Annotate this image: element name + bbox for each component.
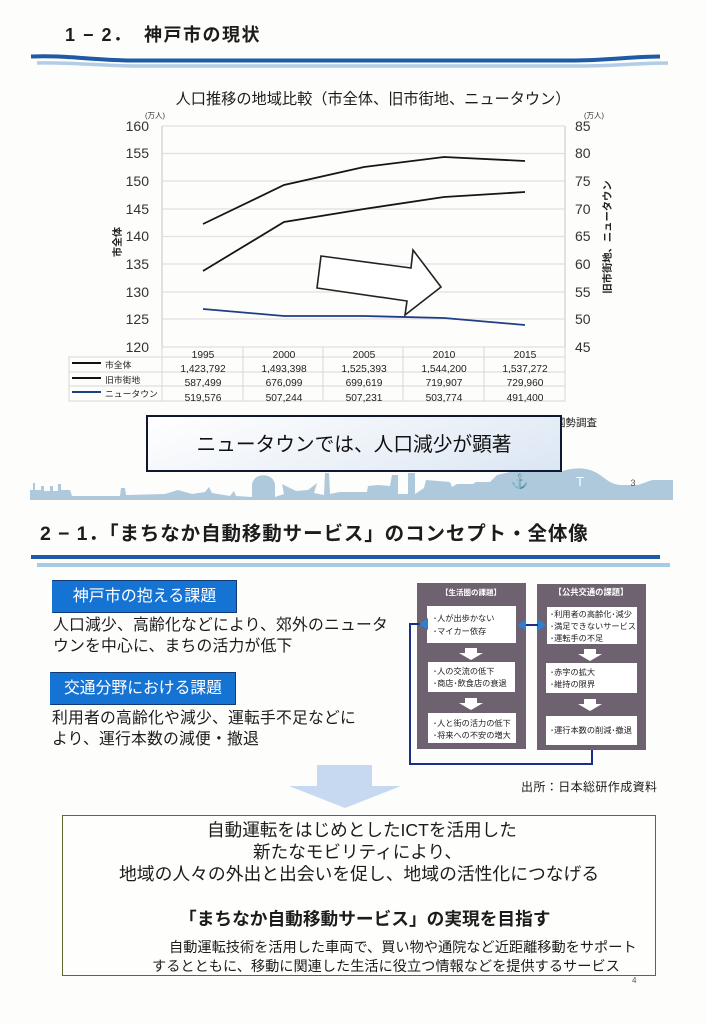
right axis labels: 65 — [575, 228, 591, 244]
label: transport issues — [50, 672, 236, 705]
text: service description line 2: するとともに、移動に関連した生活に役立つ情報などを提供するサービス — [152, 959, 620, 975]
right axis labels: 85 — [575, 118, 591, 134]
chart: population trend by area — [111, 90, 614, 355]
heading rule: section 1-2 — [30, 54, 668, 68]
heading: section 1-2 — [65, 25, 261, 45]
right axis labels: 80 — [575, 145, 591, 161]
table values: 507,231 — [346, 393, 383, 404]
table values: 699,619 — [346, 378, 383, 389]
label: Kobe city issues — [52, 580, 237, 613]
panel: public transport issues: ･赤字の拡大 — [550, 667, 595, 677]
left axis labels: 145 — [126, 201, 149, 217]
text: concept line 3: 地域の人々の外出と出会いを促し、地域の活性化につなげる — [119, 864, 599, 884]
table values: 519,576 — [185, 393, 222, 404]
panel: living area issues: ･人と街の活力の低下 — [433, 718, 511, 728]
text: goal: 「まちなか自動移動サービス」の実現を目指す — [179, 909, 550, 929]
arrow: feedback loop — [410, 618, 592, 764]
callout: new town population decline: ニュータウンでは、人口減少が顕著 — [196, 434, 512, 456]
panel: public transport issues: 【公共交通の課題】 — [554, 587, 628, 597]
diagram: vicious cycle of living area and public transport — [409, 583, 646, 765]
left axis labels: 130 — [126, 284, 149, 300]
tower mark: T — [576, 474, 584, 489]
panel: living area issues: ･人の交流の低下 — [433, 666, 494, 676]
panel: living area issues — [417, 583, 526, 749]
table values: 587,499 — [185, 378, 222, 389]
left axis labels: 150 — [126, 173, 149, 189]
left axis title: 市全体 — [111, 227, 124, 257]
panel: public transport issues: ･運転手の不足 — [550, 633, 603, 643]
left axis labels: 120 — [126, 339, 149, 355]
text: Kobe city issues — [53, 616, 388, 655]
table values — [180, 350, 548, 404]
panel: public transport issues — [537, 584, 646, 750]
right axis title: 旧市街地、ニュータウン — [601, 180, 614, 294]
table values: 1,423,792 — [180, 364, 226, 375]
table values: 2010 — [433, 350, 456, 361]
panel: living area issues: ･人が出歩かない — [433, 613, 494, 623]
right axis labels: 50 — [575, 311, 591, 327]
source note: Japan Research Institute: 出所：日本総研作成資料 — [521, 780, 657, 794]
table values: 1,537,272 — [502, 364, 548, 375]
left axis labels: (万人) — [145, 111, 165, 120]
small mark: 3 — [630, 478, 636, 488]
table values: 1995 — [192, 350, 215, 361]
arrow: upward trend — [317, 250, 441, 315]
right axis labels: 45 — [575, 339, 591, 355]
source note: census: 国勢調査 — [555, 417, 597, 429]
table values: 2000 — [273, 350, 296, 361]
table values: 2005 — [353, 350, 376, 361]
panel: living area issues: ･将来への不安の増大 — [433, 730, 511, 740]
right axis labels: 55 — [575, 284, 591, 300]
text: concept line 1: 自動運転をはじめとしたICTを活用した — [207, 820, 517, 840]
table values: 491,400 — [507, 393, 544, 404]
data table — [68, 347, 566, 404]
panel: public transport issues: ･運行本数の削減･撤退 — [550, 725, 632, 735]
left axis labels: 135 — [126, 256, 149, 272]
panel: public transport issues: ･維持の限界 — [550, 679, 595, 689]
left axis labels: 125 — [126, 311, 149, 327]
line: old urban area — [203, 192, 525, 271]
table legend: 旧市街地 — [105, 374, 140, 385]
right axis labels: 60 — [575, 256, 591, 272]
right axis labels — [575, 111, 604, 355]
table legend: ニュータウン — [105, 389, 158, 399]
text: transport issues: より、運行本数の減便・撤退 — [52, 730, 259, 748]
table values: 1,544,200 — [421, 364, 467, 375]
anchor mark: ⚓ — [511, 473, 529, 490]
text: service description line 1: 自動運転技術を活用した車両で、買い物や通院など近距離移動をサポート — [169, 940, 637, 956]
table values: 2015 — [514, 350, 537, 361]
text: transport issues — [52, 709, 356, 748]
panel: living area issues: ･商店･飲食店の衰退 — [433, 678, 507, 688]
heading: section 1-2: 1 − 2． — [65, 25, 133, 45]
arrow: down to conclusion — [289, 765, 401, 808]
chart title: 人口推移の地域比較（市全体、旧市街地、ニュータウン） — [176, 91, 570, 108]
panel: living area issues: 【生活圏の課題】 — [441, 587, 501, 597]
right axis labels: 75 — [575, 173, 591, 189]
right axis labels: 70 — [575, 201, 591, 217]
page number: 4 — [632, 976, 636, 985]
left axis labels — [126, 111, 165, 355]
panel: conclusion — [62, 815, 656, 976]
skyline: Kobe cityscape — [30, 468, 673, 500]
panel: public transport issues: ･利用者の高齢化･減少 — [550, 609, 632, 619]
left axis labels: 140 — [126, 228, 149, 244]
panel: living area issues: ･マイカー依存 — [433, 626, 486, 636]
text: Kobe city issues: ウンを中心に、まちの活力が低下 — [53, 638, 292, 655]
table values: 1,525,393 — [341, 364, 387, 375]
table values: 503,774 — [426, 393, 463, 404]
heading: section 2-1: 2 − 1．「まちなか自動移動サービス」のコンセプト・全体像 — [40, 523, 589, 545]
line: new town — [203, 309, 525, 325]
label: Kobe city issues: 神戸市の抱える課題 — [73, 588, 216, 605]
heading: section 1-2: 神戸市の現状 — [144, 25, 261, 45]
text: transport issues: 利用者の高齢化や減少、運転手不足などに — [52, 710, 356, 727]
panel: public transport issues: ･満足できないサービス — [550, 622, 636, 631]
text: concept line 2: 新たなモビリティにより、 — [253, 842, 462, 862]
callout: new town population decline — [146, 415, 562, 472]
table values: 676,099 — [266, 378, 303, 389]
heading rule: section 2-1 — [31, 555, 670, 567]
table legend: 市全体 — [105, 359, 132, 370]
arrow: between panels — [518, 619, 546, 631]
table values: 719,907 — [426, 378, 463, 389]
right axis labels: (万人) — [584, 111, 604, 120]
text: Kobe city issues: 人口減少、高齢化などにより、郊外のニュータ — [53, 617, 388, 634]
line: city total — [203, 157, 525, 224]
table legend — [72, 359, 158, 399]
table values: 1,493,398 — [261, 364, 307, 375]
table values: 507,244 — [266, 393, 303, 404]
table values: 729,960 — [507, 378, 544, 389]
label: transport issues: 交通分野における課題 — [64, 680, 222, 697]
left axis labels: 155 — [126, 145, 149, 161]
left axis labels: 160 — [126, 118, 149, 134]
